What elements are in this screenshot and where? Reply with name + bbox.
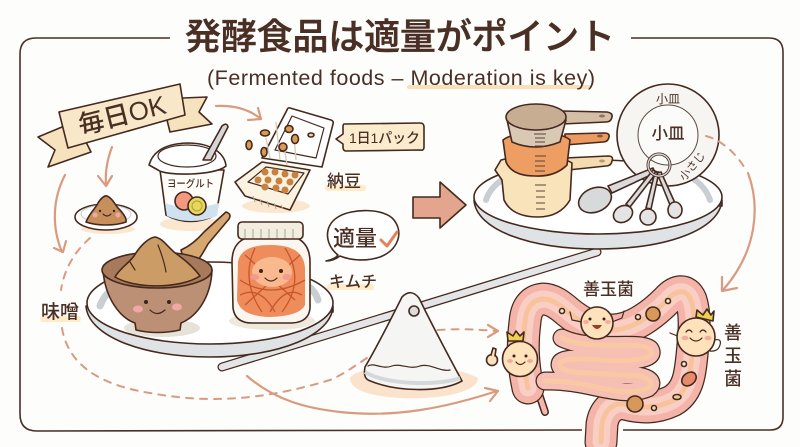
measuring spoons [575, 154, 682, 226]
label: キムチ: キムチ [329, 274, 377, 291]
label: 善玉菌 vertical: 菌 [724, 369, 742, 389]
block arrow [413, 182, 466, 228]
large intestine [430, 0, 694, 442]
title: 発酵食品は適量がポイント [185, 16, 615, 57]
ribbon: 毎日OK [38, 84, 212, 167]
measuring cups [495, 104, 612, 217]
yogurt cup [149, 124, 228, 231]
good bacteria: left with crown [486, 331, 538, 376]
intestine particles [560, 298, 699, 412]
arrow: ribbon to natto [216, 106, 261, 120]
small plate with labels: 小皿 [652, 124, 684, 143]
label: 味噌: 味噌 [41, 301, 79, 323]
label: 善玉菌 vertical: 善 [724, 323, 742, 343]
subtitle: (Fermented foods – Moderation is key) [207, 66, 595, 90]
arrow: ribbon to miso bowl [54, 175, 66, 252]
arrow: ribbon to small miso [98, 147, 112, 186]
fulcrum [350, 293, 478, 398]
good bacteria: middle smiling [570, 307, 624, 339]
speech bubble: 適量 [326, 211, 399, 261]
right plate [474, 160, 722, 249]
label: 納豆: 納豆 [327, 172, 361, 191]
arrow: plate to intestine [706, 136, 755, 291]
small plate with labels: 小さじ [677, 150, 708, 183]
wooden spoon [181, 212, 230, 265]
callout: 1日1パック [336, 123, 424, 151]
good bacteria: right with crown [670, 309, 720, 356]
left plate [86, 262, 333, 357]
small miso plate [75, 196, 137, 234]
yogurt cup: ヨーグルト [167, 177, 214, 190]
label: 善玉菌 horizontal: 善玉菌 [583, 280, 634, 299]
callout: 1日1パック: 1日1パック [349, 130, 420, 146]
small plate with labels: 小皿 [656, 92, 680, 106]
ribbon: 毎日OK: 毎日OK [75, 89, 170, 140]
balance beam [222, 252, 597, 367]
small intestine [545, 338, 651, 392]
label: 善玉菌 vertical [724, 323, 742, 389]
dashed arrow: miso to intestine [61, 238, 498, 399]
natto pack [235, 108, 333, 213]
kimchi jar with face [232, 222, 310, 323]
speech bubble: 適量: 適量 [333, 226, 377, 251]
miso bowl with face [102, 237, 212, 332]
small plate with labels [617, 84, 719, 186]
solid arrow: scale to intestine [247, 376, 498, 414]
label: 善玉菌 vertical: 玉 [724, 346, 742, 366]
